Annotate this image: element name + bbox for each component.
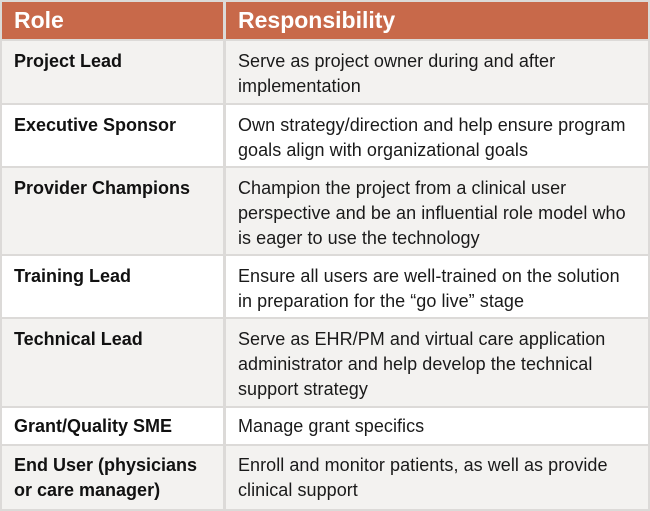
row: provider champions: Provider Champions [14, 178, 190, 198]
row: project lead [2, 41, 223, 103]
row: end user: or care manager) [14, 480, 160, 500]
row: provider champions [2, 168, 223, 254]
row: training lead: Training Lead [14, 266, 131, 286]
row: technical lead [2, 319, 223, 406]
table: administrator and help develop the technical [238, 354, 592, 374]
table: implementation [238, 76, 361, 96]
row: executive sponsor: Executive Sponsor [14, 115, 176, 135]
table: support strategy [238, 379, 368, 399]
header: role [2, 2, 223, 39]
row: grant/quality SME [2, 408, 223, 444]
header: responsibility [226, 2, 648, 39]
header: role: Role [14, 7, 64, 33]
table: perspective and be an influential role model who [238, 203, 626, 223]
row: technical lead: Technical Lead [14, 329, 143, 349]
table: Own strategy/direction and help ensure program [238, 115, 626, 135]
table: Ensure all users are well-trained on the solution [238, 266, 620, 286]
table: goals align with organizational goals [238, 140, 528, 160]
table: Enroll and monitor patients, as well as provide [238, 455, 608, 475]
row: end user [2, 446, 223, 509]
table: is eager to use the technology [238, 228, 480, 248]
table: Serve as EHR/PM and virtual care application [238, 329, 605, 349]
row: executive sponsor [2, 105, 223, 166]
table: Champion the project from a clinical user [238, 178, 566, 198]
header: responsibility: Responsibility [238, 7, 395, 33]
table: clinical support [238, 480, 358, 500]
row: training lead [2, 256, 223, 317]
table: Manage grant specifics [238, 416, 424, 436]
row: end user: End User (physicians [14, 455, 197, 475]
row: grant/quality SME: Grant/Quality SME [14, 416, 172, 436]
row: project lead: Project Lead [14, 51, 122, 71]
table: in preparation for the “go live” stage [238, 291, 524, 311]
table: Serve as project owner during and after [238, 51, 555, 71]
